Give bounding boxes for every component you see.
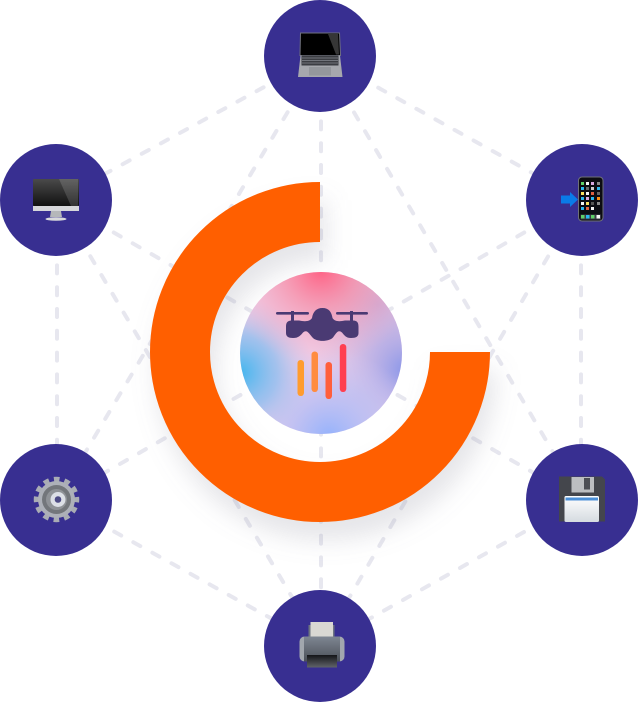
node: laptop <box>264 0 376 112</box>
icon: monitor <box>33 179 79 221</box>
icon: printer <box>300 622 344 668</box>
bar chart <box>298 344 346 399</box>
icon: floppy <box>559 476 605 522</box>
orange ring <box>180 212 460 492</box>
icon: laptop <box>298 33 342 77</box>
center gradient circle <box>240 272 402 434</box>
connection lines <box>57 56 581 646</box>
icon: gear <box>36 480 76 520</box>
icon: phone with arrow <box>561 177 603 221</box>
node: gear <box>0 444 112 556</box>
icon: drone <box>276 308 368 341</box>
node: floppy disk <box>526 444 638 556</box>
node: phone <box>526 144 638 256</box>
node: desktop monitor <box>0 144 112 256</box>
node: printer <box>264 590 376 702</box>
ring shadow <box>186 230 466 510</box>
